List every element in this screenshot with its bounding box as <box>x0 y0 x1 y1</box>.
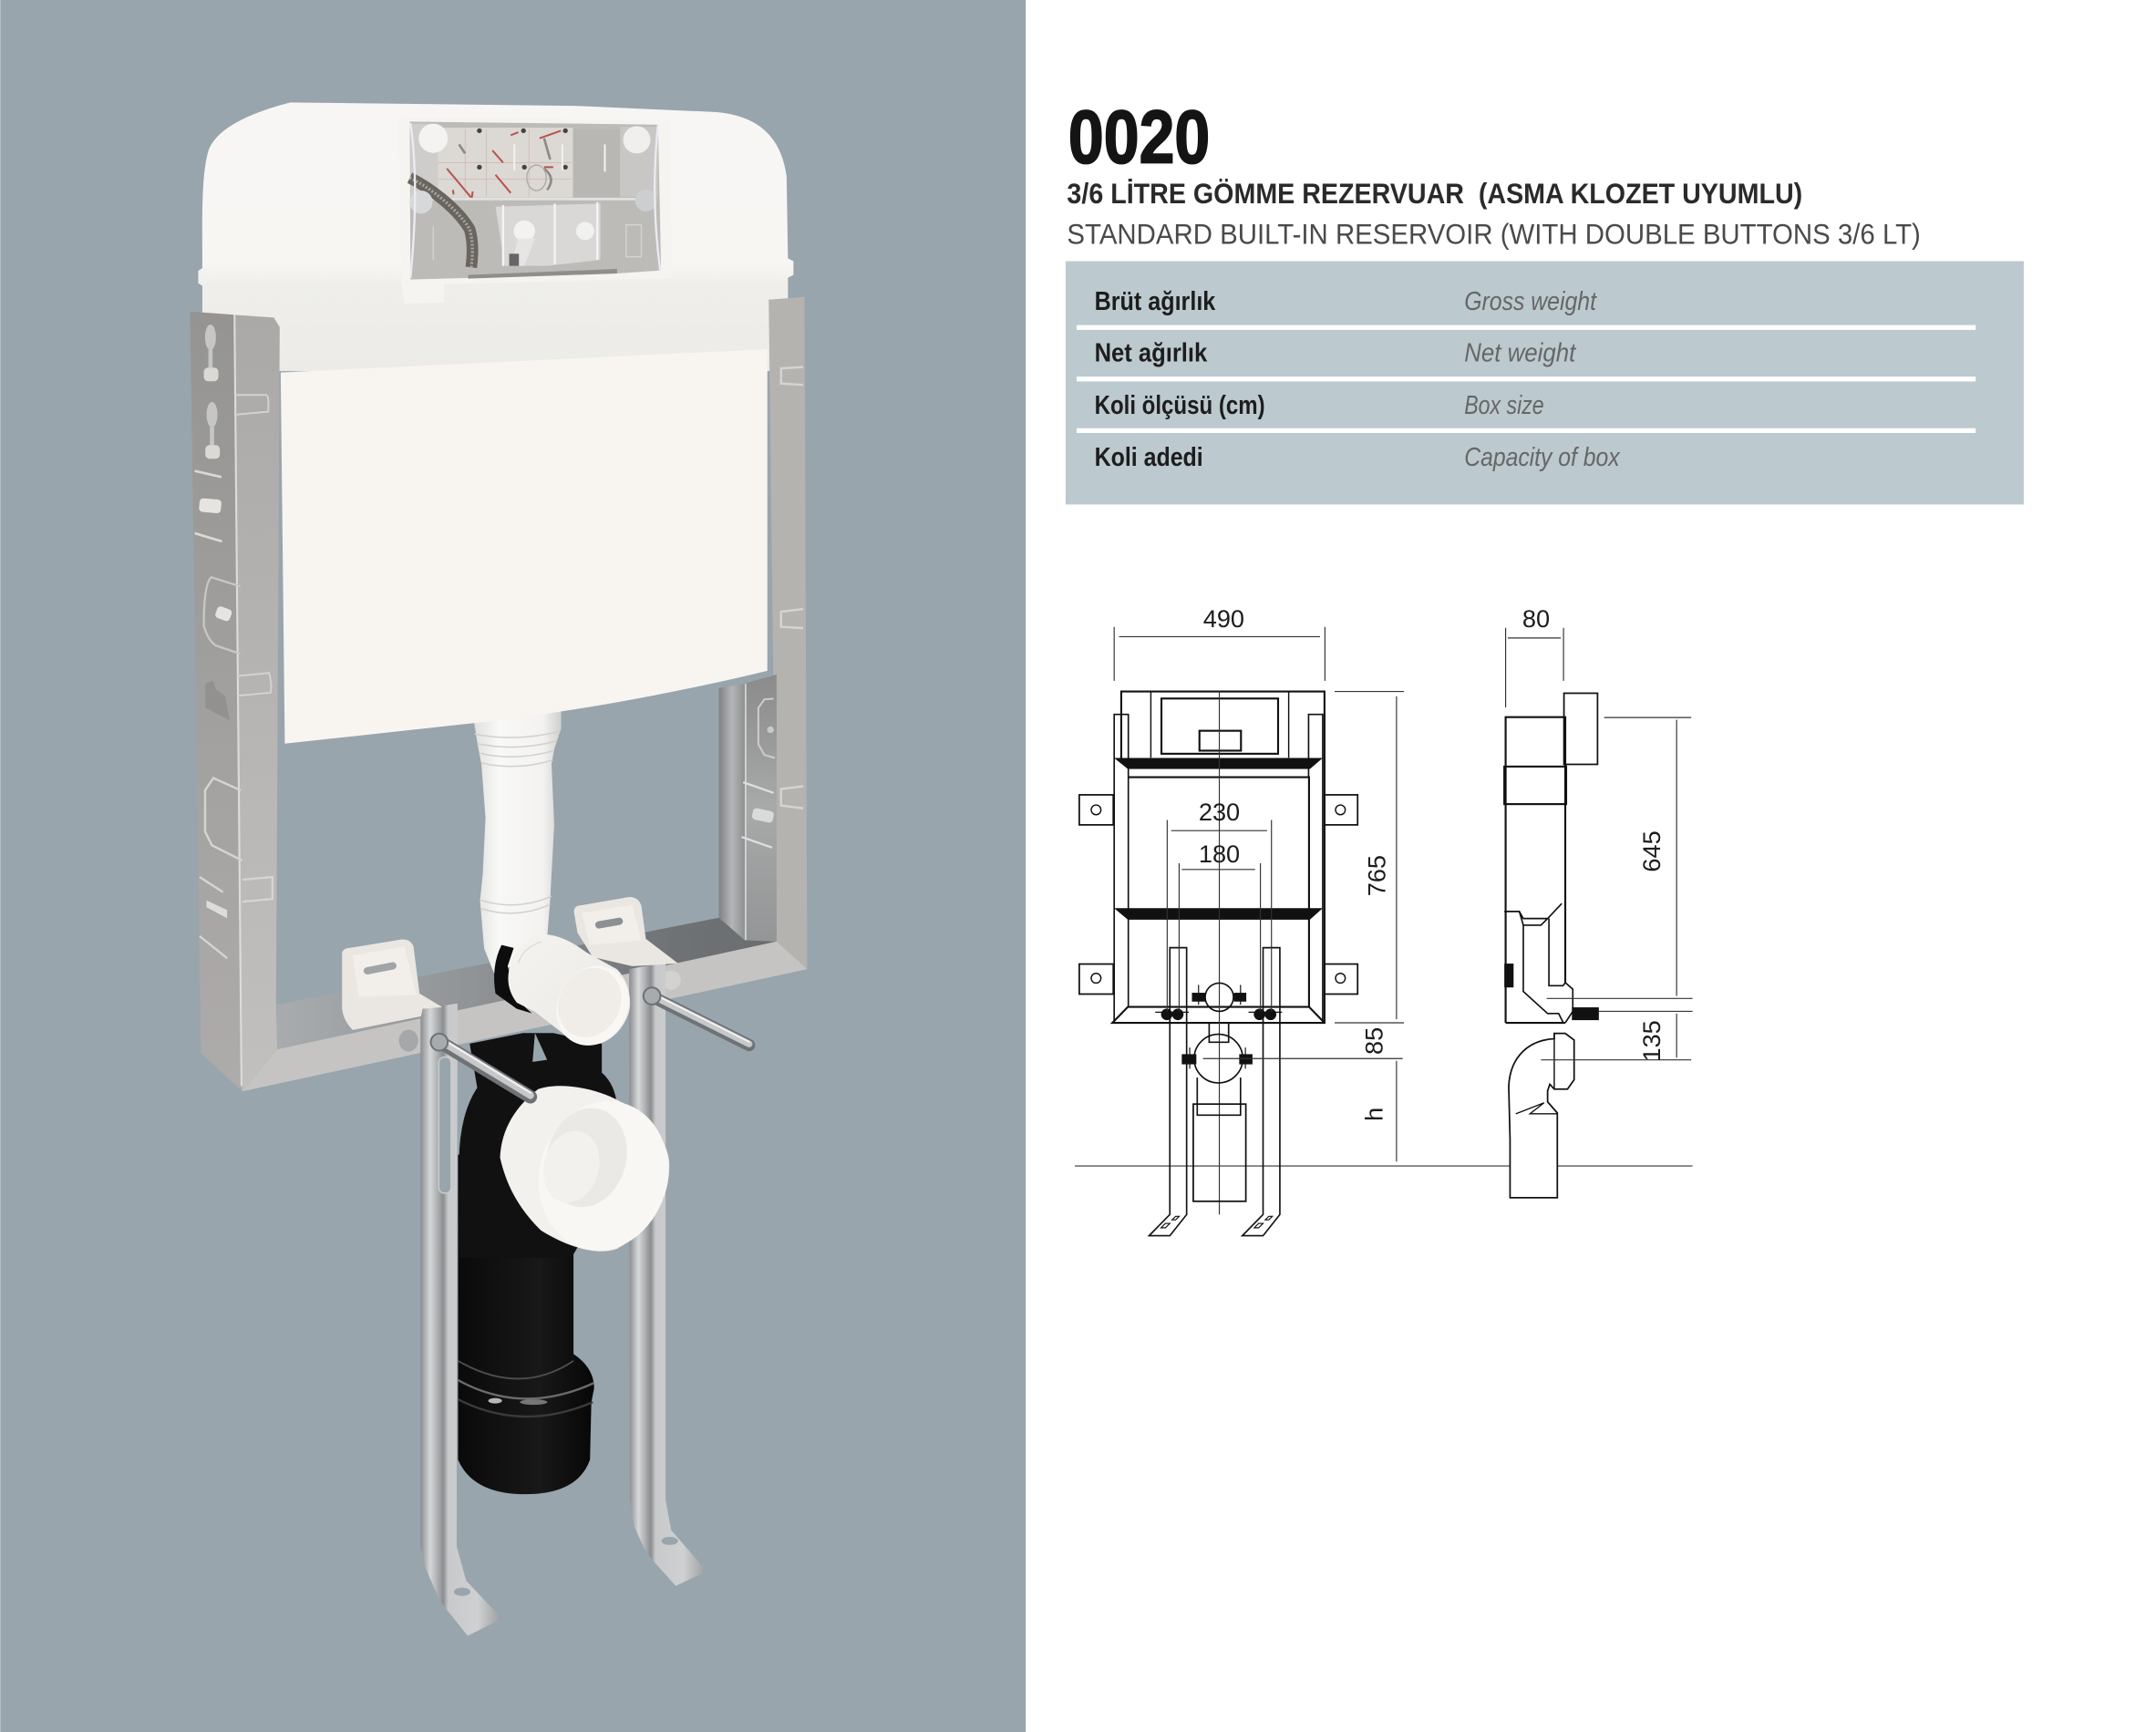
screw domes <box>418 124 448 153</box>
dimension labels: 230 <box>1199 798 1240 826</box>
Turkish title: 3/6 LİTRE GÖMME REZERVUAR (ASMA KLOZET UYUMLU) <box>1067 177 1802 210</box>
side view <box>1504 693 1599 1198</box>
black waste pipe <box>458 1033 617 1494</box>
white mounting bracket left <box>342 940 442 1030</box>
front view dimensions <box>1114 627 1404 1161</box>
steel mounting frame <box>191 297 807 1091</box>
dimension labels: 490 <box>1203 604 1244 633</box>
row: capacity of box: Koli adedi <box>1095 443 1203 472</box>
dimension labels: 765 <box>1362 855 1390 896</box>
row: gross weight <box>1095 287 1597 316</box>
front view <box>1079 692 1357 1236</box>
row: capacity of box: Capacity of box <box>1464 443 1621 472</box>
transparent control window <box>398 117 672 304</box>
row: net weight <box>1095 339 1576 368</box>
dimension labels: 80 <box>1522 604 1550 633</box>
technical drawing <box>1075 604 1693 1236</box>
product code heading: 0020 <box>1068 95 1210 180</box>
small pipe socket <box>494 934 643 1058</box>
cistern body <box>198 102 793 371</box>
row: box size: Box size <box>1464 391 1544 420</box>
galvanised bottom strip <box>276 918 777 1049</box>
panel: product photo background <box>0 0 1026 1732</box>
sockets, brackets and rods <box>342 897 749 1265</box>
specification table <box>1066 262 2024 504</box>
dimension labels <box>1199 604 1666 1121</box>
right floor bracket leg <box>629 963 707 1586</box>
row: box size <box>1095 391 1544 420</box>
row: capacity of box <box>1095 443 1621 472</box>
braided hose <box>410 178 472 267</box>
dimension labels: h <box>1359 1108 1387 1121</box>
dimension labels: 85 <box>1359 1027 1387 1055</box>
row: net weight: Net ağırlık <box>1095 339 1207 368</box>
row: gross weight: Gross weight <box>1464 287 1597 316</box>
row: gross weight: Brüt ağırlık <box>1095 287 1215 316</box>
rail details <box>195 325 271 720</box>
white flexible drain pipe <box>472 708 562 976</box>
front insulation panel <box>281 349 768 744</box>
English subtitle: STANDARD BUILT-IN RESERVOIR (WITH DOUBLE BUTTONS 3/6 LT) <box>1067 218 1921 251</box>
front bottom bar <box>242 942 807 1091</box>
galvanised right box <box>719 675 777 942</box>
threaded rods <box>431 987 749 1097</box>
row: box size: Koli ölçüsü (cm) <box>1095 391 1265 420</box>
large pipe socket <box>500 1086 685 1265</box>
white mounting bracket right <box>573 897 677 966</box>
left floor bracket leg <box>420 1004 502 1635</box>
row: net weight: Net weight <box>1464 339 1576 368</box>
side view dimensions <box>1506 628 1693 1060</box>
dimension labels: 180 <box>1199 840 1240 868</box>
dimension labels: 645 <box>1637 830 1666 872</box>
floor line <box>1075 1165 1693 1167</box>
dimension labels: 135 <box>1637 1020 1666 1062</box>
clear buttons <box>496 203 601 266</box>
product photo: built-in reservoir <box>191 102 807 1635</box>
